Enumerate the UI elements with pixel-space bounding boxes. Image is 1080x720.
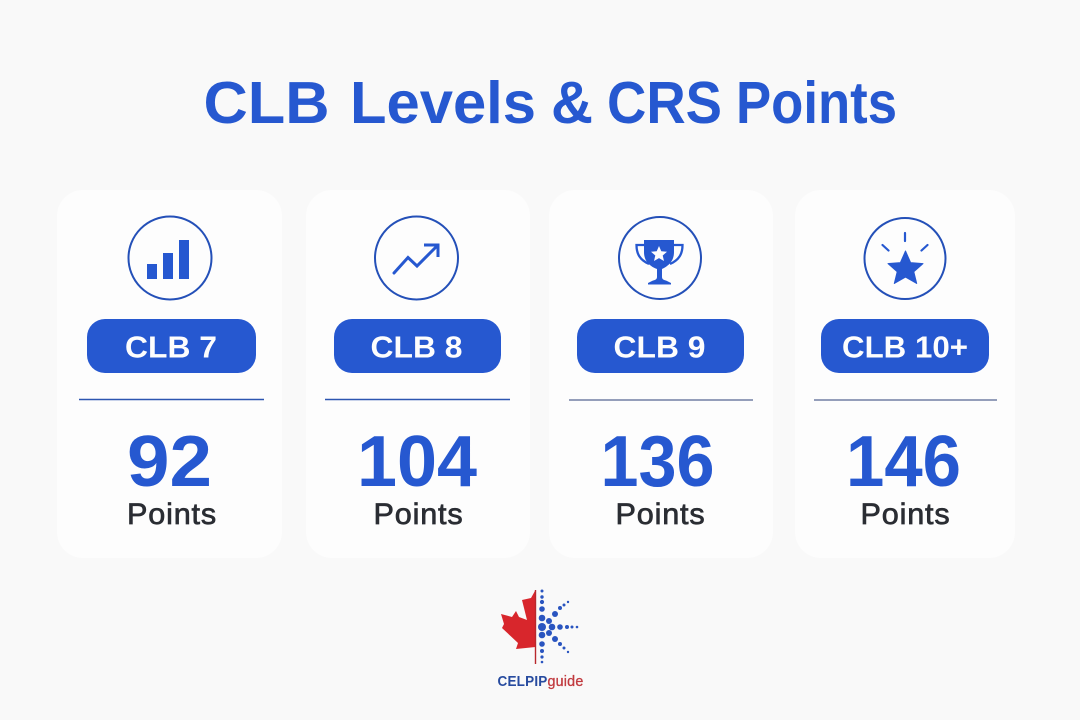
value: 92 points: Points	[127, 498, 217, 531]
value: 146 points: Points	[860, 498, 950, 531]
logo: CELPIPguide	[498, 590, 584, 690]
badge: CLB 10+	[821, 319, 989, 373]
title: Levels	[350, 70, 536, 136]
panel: CLB 7	[57, 190, 282, 558]
title: CRS	[607, 70, 722, 136]
title: &	[551, 70, 593, 136]
title: Points	[736, 70, 897, 136]
icon: star with rays	[864, 218, 946, 299]
value: 136 points: 136	[600, 422, 714, 502]
icon: trend arrow	[375, 216, 458, 300]
title	[204, 70, 897, 136]
badge: CLB 10+: CLB 10+	[842, 330, 968, 364]
badge: CLB 8: CLB 8	[370, 330, 462, 364]
value: 104 points: Points	[374, 498, 464, 531]
badge: CLB 8	[334, 319, 501, 373]
value: 92 points	[127, 422, 217, 531]
value: 104 points: 104	[357, 422, 477, 502]
panel: CLB 10+	[795, 190, 1015, 558]
icon: trophy	[619, 217, 701, 299]
badge: CLB 9	[577, 319, 744, 373]
title: CLB	[204, 70, 330, 136]
icon: blue dot burst	[538, 590, 578, 663]
badge: CLB 7: CLB 7	[125, 330, 217, 364]
badge: CLB 7	[87, 319, 256, 373]
icon: bar chart	[128, 216, 212, 300]
wordmark: CELPIP	[498, 674, 548, 690]
value: 146 points: 146	[846, 422, 961, 502]
badge: CLB 9: CLB 9	[614, 330, 706, 364]
panel: CLB 9	[549, 190, 773, 558]
wordmark	[498, 674, 584, 690]
value: 92 points: 92	[127, 422, 212, 502]
panel: CLB 8	[306, 190, 530, 558]
wordmark: guide	[548, 674, 584, 690]
icon: red maple leaf half	[501, 590, 536, 664]
value: 136 points: Points	[616, 498, 706, 531]
